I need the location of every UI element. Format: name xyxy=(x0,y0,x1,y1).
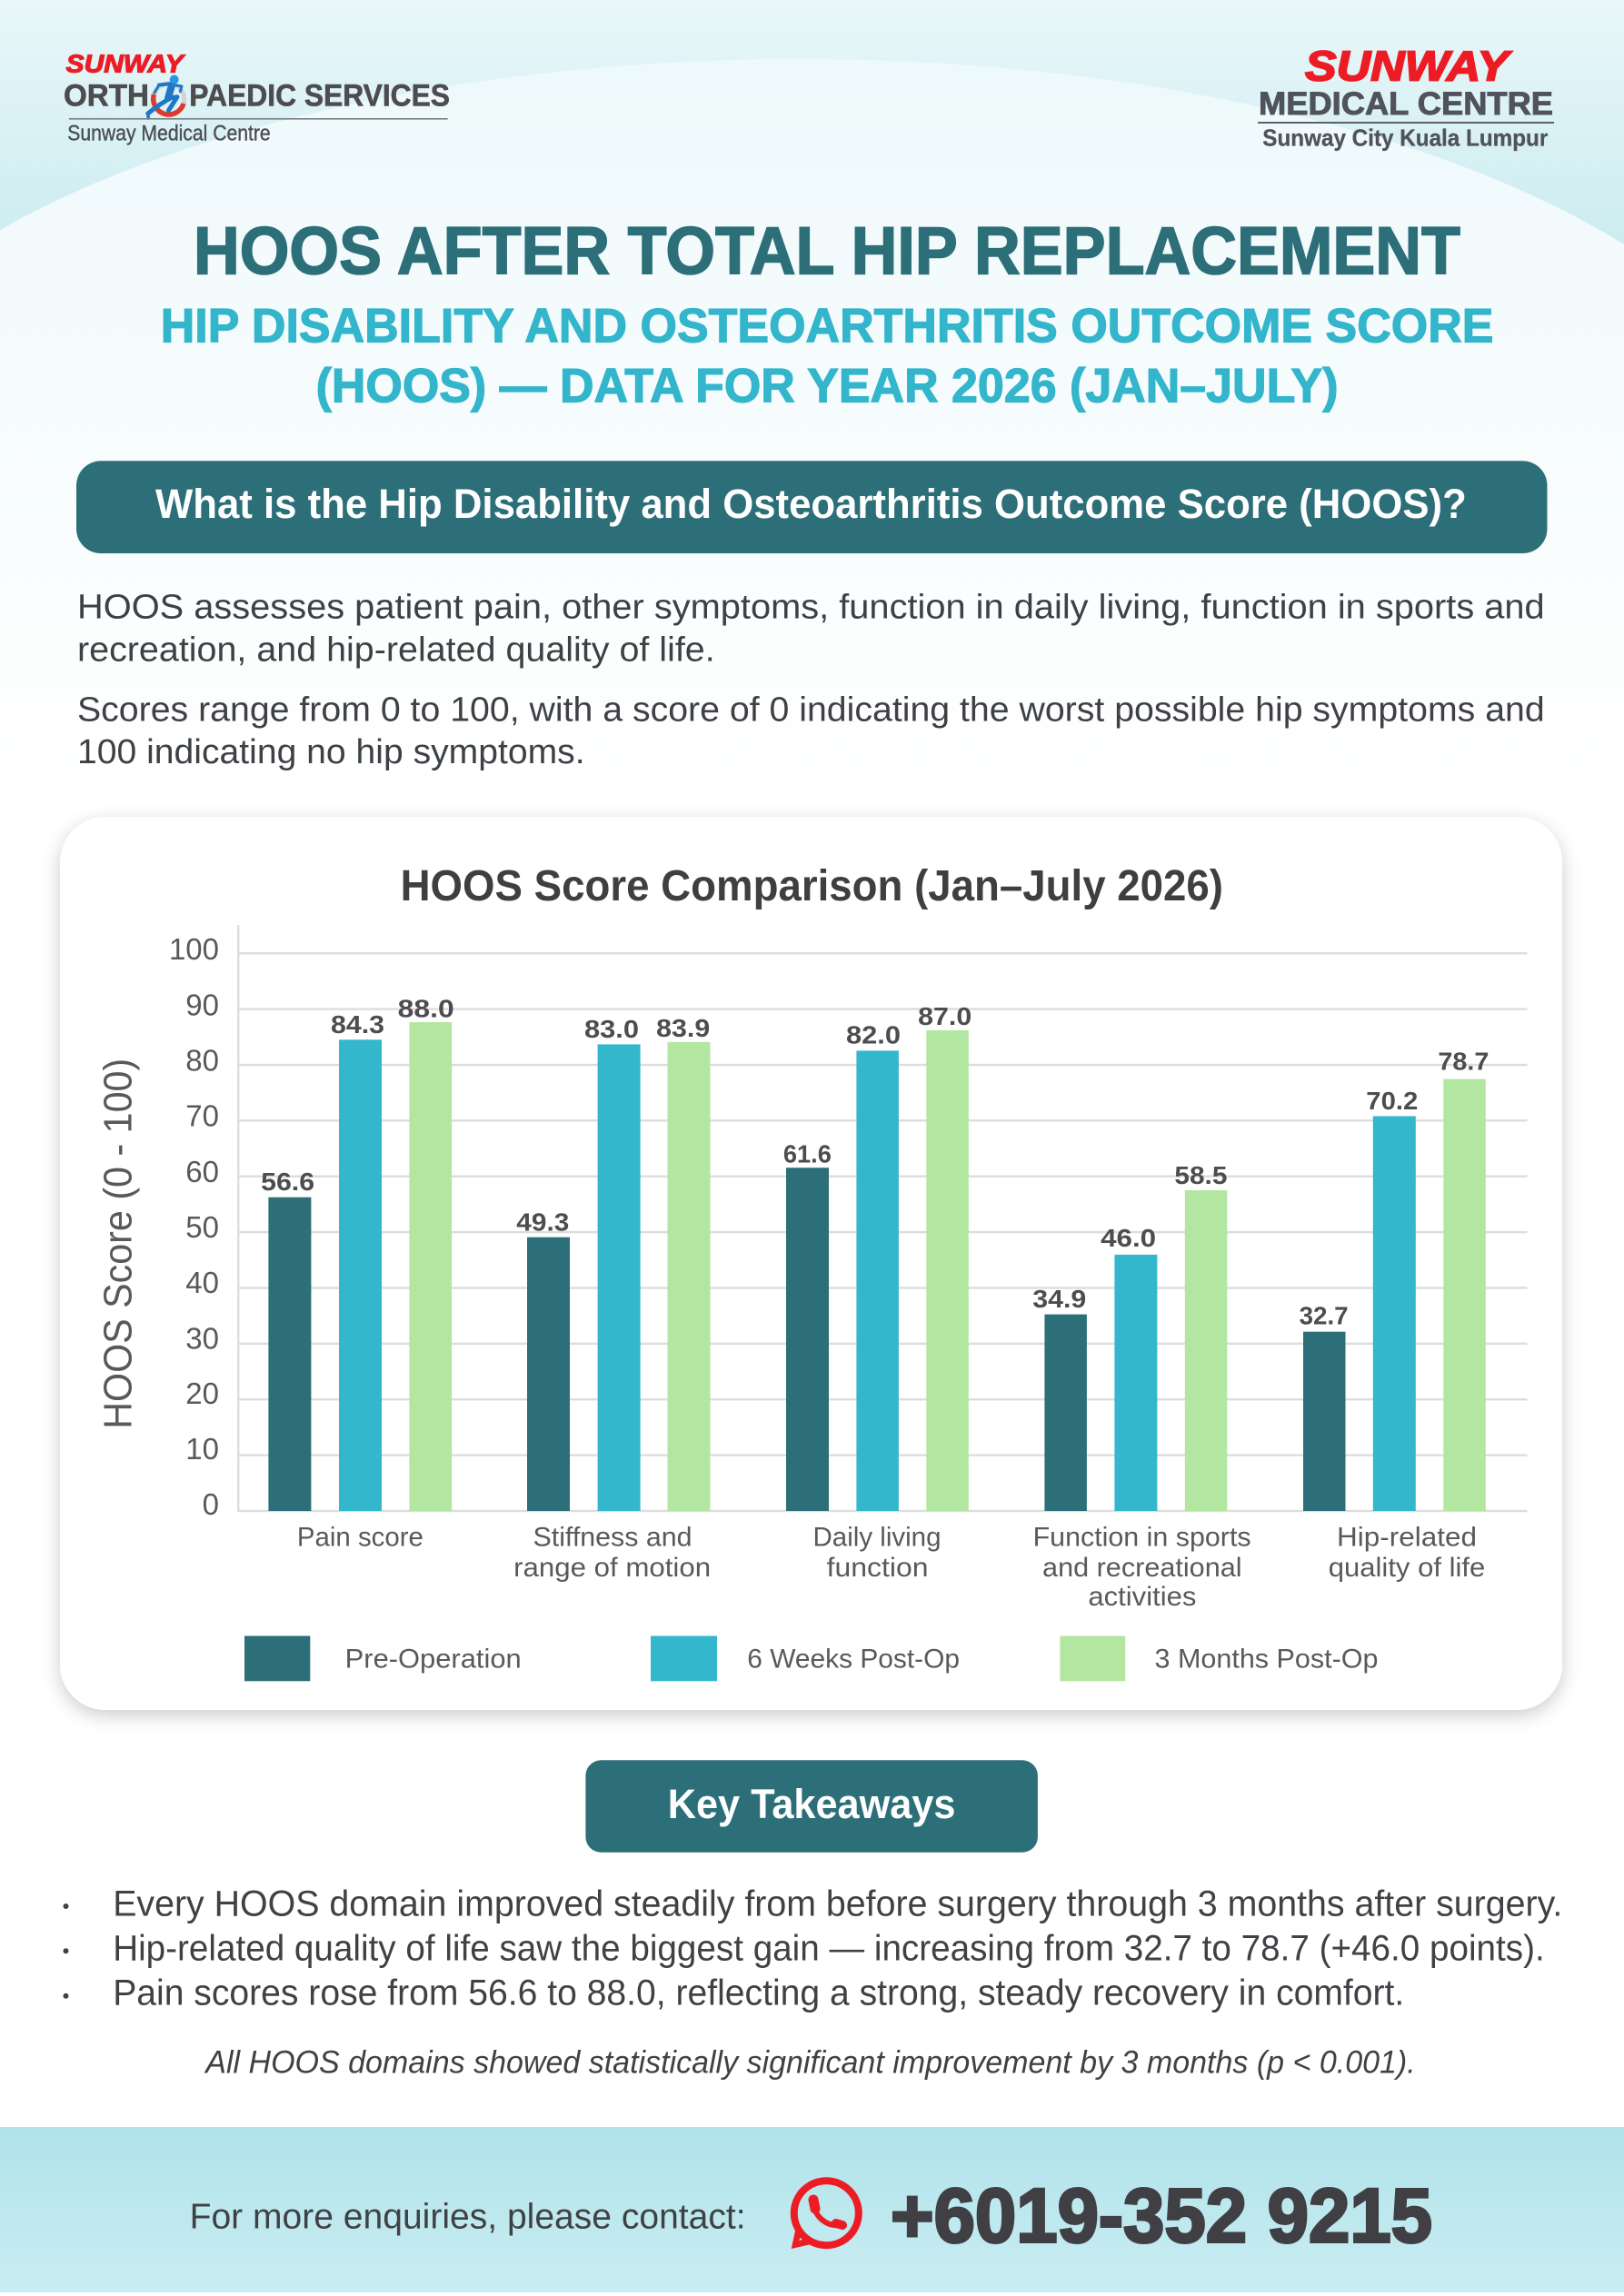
value labels: 78.7 xyxy=(1438,1047,1489,1075)
value labels: 49.3 xyxy=(516,1208,569,1237)
key takeaways list: Hip-related quality of life saw the biggest gain — increasing from 32.7 to 78.7 (+46.0 points). xyxy=(113,1929,1545,1969)
category labels: Hip-related xyxy=(1337,1523,1477,1553)
subtitle: HIP DISABILITY AND OSTEOARTHRITIS OUTCOME SCORE xyxy=(161,300,1494,353)
key takeaways list: Pain scores rose from 56.6 to 88.0, reflecting a strong, steady recovery in comfort. xyxy=(113,1973,1404,2013)
icon: WhatsApp xyxy=(792,2181,859,2249)
grid lines and axes xyxy=(237,925,1527,1512)
bars: pre-operation xyxy=(268,1168,1345,1511)
y axis ticks: 60 xyxy=(185,1155,219,1188)
value labels: 84.3 xyxy=(331,1010,384,1039)
y axis ticks: 40 xyxy=(185,1266,219,1299)
y axis ticks: 100 xyxy=(169,932,219,966)
value labels: 56.6 xyxy=(261,1168,314,1196)
legend: 6 Weeks Post-Op xyxy=(747,1645,960,1675)
subtitle: (HOOS) — DATA FOR YEAR 2026 (JAN–JULY) xyxy=(316,360,1339,413)
text block: HOOS description: 100 indicating no hip symptoms. xyxy=(77,733,585,771)
logo: Sunway Orthopaedic Services: SUNWAY xyxy=(66,49,185,77)
category labels: function xyxy=(827,1553,929,1583)
legend: 3 Months Post-Op xyxy=(1154,1645,1378,1675)
value labels: 46.0 xyxy=(1101,1224,1156,1252)
logo: Sunway Orthopaedic Services xyxy=(64,49,450,145)
value labels: 32.7 xyxy=(1300,1301,1349,1329)
y axis ticks: 80 xyxy=(185,1043,219,1078)
y axis title: HOOS Score (0 - 100) xyxy=(95,1059,140,1429)
y axis ticks: 10 xyxy=(185,1432,219,1466)
category labels: Pain score xyxy=(297,1523,423,1553)
logo: Sunway Medical Centre: Sunway City Kuala Lumpur xyxy=(1262,124,1548,152)
value labels: 70.2 xyxy=(1366,1087,1418,1115)
value labels: 58.5 xyxy=(1174,1161,1227,1189)
category labels: and recreational xyxy=(1042,1553,1242,1583)
chart heading: HOOS Score Comparison (Jan–July 2026) xyxy=(401,862,1223,910)
value labels: 61.6 xyxy=(783,1139,832,1168)
y axis ticks: 90 xyxy=(185,989,219,1021)
text block: HOOS description xyxy=(77,589,1545,771)
subtitle xyxy=(161,300,1494,413)
y axis ticks: 70 xyxy=(185,1099,219,1132)
logo: Sunway Orthopaedic Services: ORTH xyxy=(64,79,149,114)
text block: HOOS description: recreation, and hip-related quality of life. xyxy=(77,631,715,669)
value labels: 83.9 xyxy=(656,1014,710,1042)
phone number: +6019-352 9215 xyxy=(891,2173,1432,2259)
bars: 6 weeks post-op xyxy=(339,1039,1416,1511)
title: HOOS AFTER TOTAL HIP REPLACEMENT xyxy=(194,214,1460,289)
y axis ticks xyxy=(169,932,219,1521)
legend: Pre-Operation xyxy=(345,1645,522,1675)
section banner: key takeaways xyxy=(585,1760,1038,1853)
note: statistical significance: All HOOS domains showed statistically significant improvement by 3 months (p < 0.001). xyxy=(204,2045,1416,2081)
value labels: 82.0 xyxy=(846,1021,901,1049)
panel: chart card xyxy=(60,817,1562,1710)
logo: Sunway Medical Centre xyxy=(1258,42,1554,152)
text block: HOOS description: Scores range from 0 to 100, with a score of 0 indicating the worst possible hip symptoms and xyxy=(77,691,1545,729)
y axis ticks: 50 xyxy=(185,1210,219,1244)
value labels: 87.0 xyxy=(918,1002,971,1030)
bars: 3 months post-op xyxy=(409,1022,1486,1511)
value labels: 34.9 xyxy=(1032,1285,1086,1313)
logo: Sunway Orthopaedic Services: PAEDIC SERVICES xyxy=(189,79,450,114)
key takeaways list xyxy=(64,1884,1562,2013)
y axis ticks: 0 xyxy=(203,1487,219,1521)
category labels: quality of life xyxy=(1329,1553,1485,1583)
text block: HOOS description: HOOS assesses patient pain, other symptoms, function in daily living, function in sports and xyxy=(77,589,1545,627)
logo: Sunway Medical Centre: MEDICAL CENTRE xyxy=(1259,86,1553,122)
footer: contact band xyxy=(0,2127,1624,2292)
legend xyxy=(244,1635,1378,1681)
logo: Sunway Medical Centre: SUNWAY xyxy=(1305,42,1513,89)
background: header gradient and arch xyxy=(0,0,1624,818)
section banner: key takeaways: Key Takeaways xyxy=(668,1781,956,1827)
section banner: what is HOOS xyxy=(76,461,1547,553)
y axis ticks: 30 xyxy=(185,1321,219,1356)
section banner: what is HOOS: What is the Hip Disability and Osteoarthritis Outcome Score (HOOS)? xyxy=(155,481,1467,527)
y axis ticks: 20 xyxy=(185,1377,219,1410)
logo: Sunway Orthopaedic Services: Sunway Medical Centre xyxy=(67,121,271,145)
category labels: Function in sports xyxy=(1033,1523,1251,1553)
value labels: 88.0 xyxy=(398,994,454,1022)
category labels: Daily living xyxy=(812,1523,942,1553)
footer: contact band: For more enquiries, please contact: xyxy=(190,2198,746,2237)
category labels: activities xyxy=(1088,1582,1196,1612)
category labels xyxy=(297,1523,1485,1612)
category labels: range of motion xyxy=(513,1553,711,1583)
category labels: Stiffness and xyxy=(533,1523,692,1553)
value labels xyxy=(261,994,1489,1329)
key takeaways list: Every HOOS domain improved steadily from before surgery through 3 months after surgery. xyxy=(113,1884,1562,1923)
value labels: 83.0 xyxy=(584,1015,639,1043)
